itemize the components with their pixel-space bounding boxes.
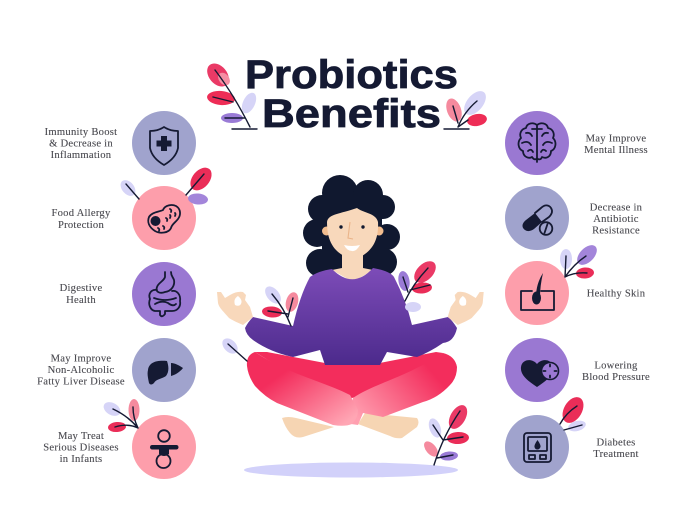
icon: brain	[519, 123, 555, 162]
label: Lowering	[594, 360, 638, 372]
shirt and arms	[245, 268, 457, 365]
plant: food allergy left	[118, 177, 139, 199]
plant: lower right	[421, 402, 471, 465]
item: digestive health	[60, 262, 196, 326]
label: Inflammation	[51, 150, 112, 161]
plant: infants	[101, 399, 140, 433]
icon: pacifier	[150, 430, 178, 468]
item: immunity boost	[45, 111, 196, 175]
label: Antibiotic	[593, 214, 639, 225]
feet	[282, 413, 418, 438]
plant: healthy skin	[560, 242, 600, 279]
item: antibiotic resistance	[505, 186, 643, 250]
label: Blood Pressure	[582, 372, 650, 383]
facial features	[339, 222, 365, 251]
label: May Treat	[58, 431, 104, 442]
item: blood pressure	[505, 338, 650, 402]
label: Mental Illness	[584, 145, 648, 156]
plant: centre left	[262, 283, 300, 326]
item: infants	[43, 415, 196, 479]
neck and face	[322, 208, 384, 282]
label: Treatment	[593, 449, 639, 460]
item: mental illness	[505, 111, 648, 175]
icon: peanut	[148, 205, 180, 233]
plant: title left	[203, 59, 259, 129]
plant: title right	[443, 87, 490, 129]
label: Immunity Boost	[45, 127, 117, 138]
left hand	[217, 292, 253, 325]
label: May Improve	[586, 134, 646, 144]
icon: stomach and intestines	[149, 272, 180, 316]
title: Probiotics	[245, 53, 458, 97]
item: fatty liver	[37, 338, 196, 402]
title	[245, 53, 458, 136]
icon: heart with gauge	[521, 360, 558, 387]
label: Decrease in	[590, 202, 643, 214]
shadow	[244, 462, 458, 478]
label: Non-Alcoholic	[48, 365, 114, 376]
icon: glucose meter	[524, 433, 551, 462]
plant: lower left	[219, 335, 247, 361]
icon: pills	[522, 205, 552, 235]
right hand	[448, 292, 484, 325]
item: healthy skin	[505, 261, 646, 325]
icon: shield	[150, 127, 178, 165]
illustration: meditating woman	[217, 175, 484, 478]
label: May Improve	[51, 354, 111, 364]
item: diabetes	[505, 415, 639, 479]
title: Benefits	[262, 92, 441, 136]
label: Fatty Liver Disease	[37, 376, 125, 388]
legs	[247, 352, 457, 426]
item: food allergy	[51, 186, 196, 250]
label: Health	[66, 295, 96, 306]
plant: centre right	[397, 257, 440, 312]
label: Food Allergy	[51, 208, 111, 219]
label: Protection	[58, 220, 104, 231]
label: Digestive	[60, 283, 102, 294]
plant: diabetes	[558, 393, 588, 433]
icon: liver	[148, 361, 183, 384]
label: Healthy Skin	[587, 288, 646, 300]
hair	[303, 175, 400, 277]
icon: skin and hair follicle	[521, 273, 554, 310]
plant: food allergy right	[186, 164, 216, 205]
label: Serious Diseases	[43, 442, 119, 454]
label: in Infants	[60, 454, 102, 465]
label: Diabetes	[596, 438, 636, 448]
label: & Decrease in	[49, 138, 113, 150]
label: Resistance	[592, 226, 640, 236]
